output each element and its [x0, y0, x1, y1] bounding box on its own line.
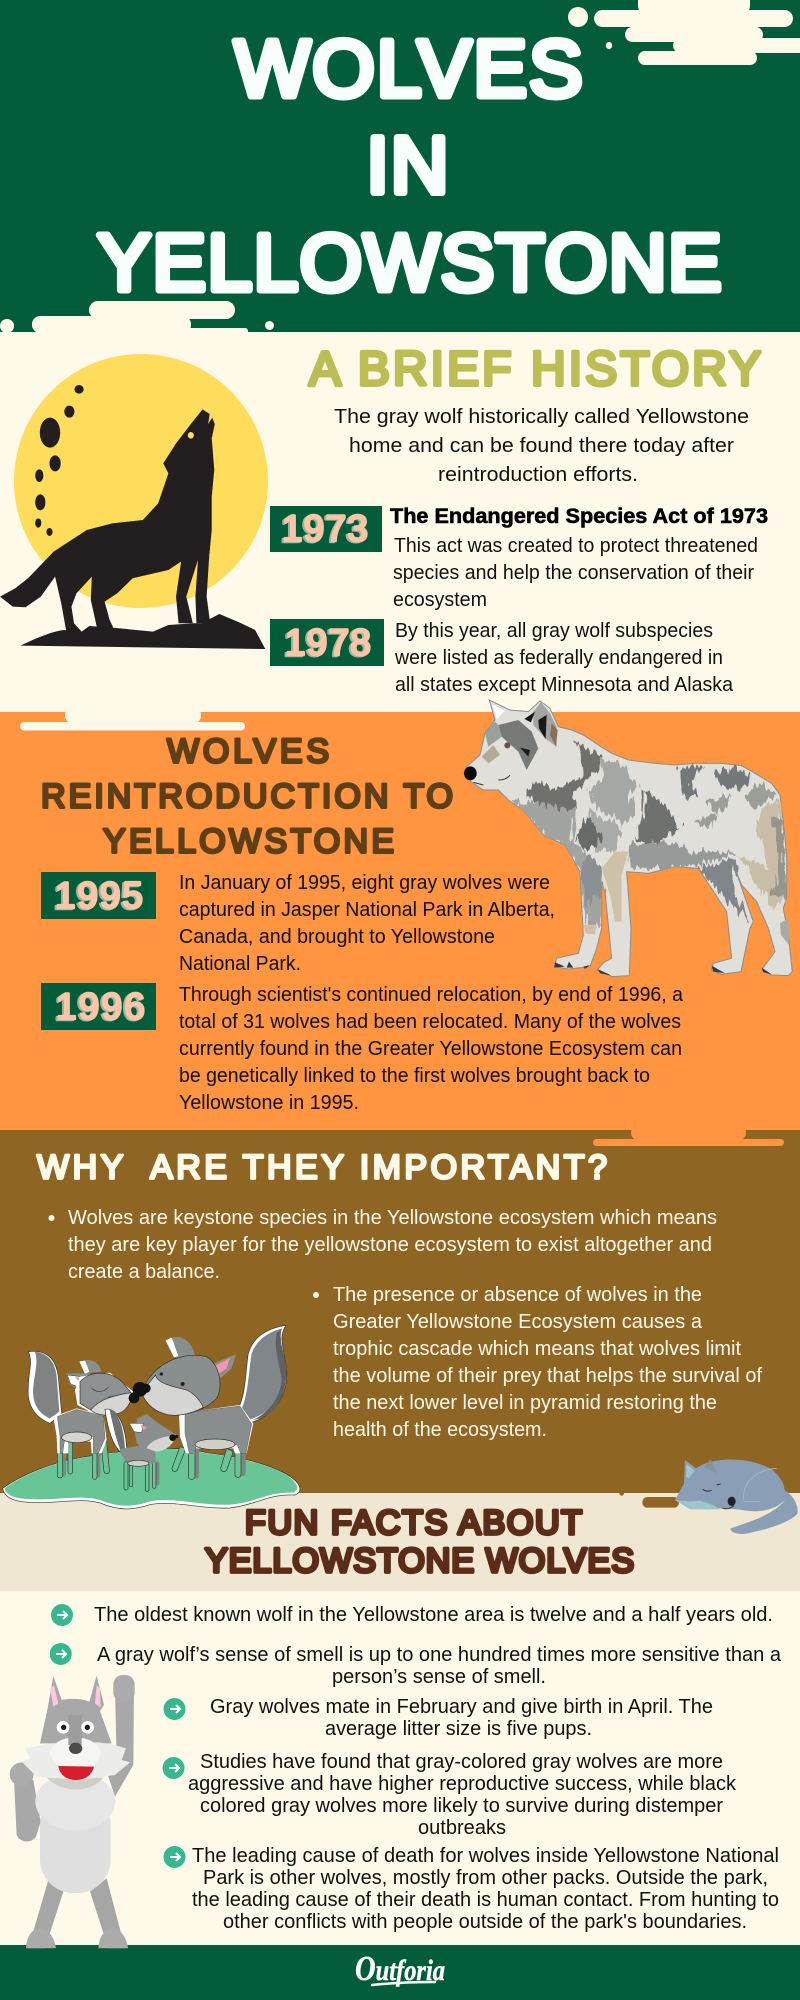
- panel: footer: [0, 1945, 800, 2000]
- cloud: bottom left: [0, 301, 274, 334]
- year badge: 1995: [41, 872, 156, 919]
- text: 1978 description: [394, 619, 734, 696]
- pup wolf: [105, 1409, 178, 1491]
- text: fact 5: the leading cause of their death is human contact. From hunting to: [192, 1888, 779, 1911]
- text: fact 4: aggressive and have higher reproductive success, while black: [188, 1772, 737, 1795]
- text: history intro: [334, 405, 749, 486]
- heading: fun facts about yellowstone wolves: [205, 1504, 634, 1580]
- panel: title header: [0, 0, 800, 334]
- subheading: endangered species act: The Endangered Species Act of 1973: [390, 505, 768, 528]
- bullet: trophic cascade: trophic cascade which means that wolves limit: [333, 1337, 741, 1360]
- icon: moon: [14, 354, 268, 608]
- bullet: keystone species: Wolves are keystone species in the Yellowstone ecosystem which means: [68, 1206, 717, 1229]
- big wolf: [142, 1325, 287, 1479]
- bullet: keystone species: create a balance.: [68, 1260, 220, 1283]
- text: fact 2: person’s sense of smell.: [332, 1665, 546, 1688]
- mother wolf: [28, 1351, 151, 1479]
- bullet: keystone species: they are key player for the yellowstone ecosystem to exist altogether and: [68, 1233, 712, 1256]
- illustration: standing gray wolf: [464, 700, 792, 977]
- panel: a brief history: [0, 332, 800, 712]
- bullet: trophic cascade: the volume of their prey that helps the survival of: [333, 1364, 762, 1387]
- heading: wolves reintroduction to yellowstone: REINTRODUCTION TO: [41, 778, 453, 816]
- text: 1978 description: By this year, all gray wolf subspecies: [395, 619, 713, 642]
- text: history intro: reintroduction efforts.: [438, 463, 638, 486]
- text: fact 4: colored gray wolves more likely to survive during distemper: [200, 1794, 723, 1817]
- text: 1996 description: Through scientist's continued relocation, by end of 1996, a: [179, 983, 684, 1006]
- text: 1978 description: were listed as federally endangered in: [394, 646, 723, 669]
- year badge: 1973: 1973: [282, 508, 368, 549]
- text: 1996 description: be genetically linked to the first wolves brought back to: [179, 1064, 650, 1087]
- illustration: sleeping blue wolf: [619, 1459, 798, 1534]
- text: 1996 description: total of 31 wolves had been relocated. Many of the wolves: [179, 1010, 681, 1033]
- year badge: 1996: [41, 983, 156, 1030]
- text: fact 5: [192, 1844, 779, 1933]
- icon: arrow bullet 3: [164, 1698, 186, 1720]
- title: YELLOWSTONE: [98, 218, 722, 307]
- heading: wolves reintroduction to yellowstone: YELLOWSTONE: [103, 822, 394, 860]
- heading: a brief history: A BRIEF HISTORY: [309, 343, 761, 396]
- text: fact 1: The oldest known wolf in the Yellowstone area is twelve and a half years old.: [94, 1603, 773, 1626]
- icon: arrow bullet 2: [50, 1643, 72, 1665]
- text: fact 3: [210, 1695, 713, 1740]
- text: 1996 description: currently found in the Greater Yellowstone Ecosystem can: [179, 1037, 682, 1060]
- text: 1973 description: [393, 534, 758, 611]
- cloud: brown panel top: [593, 1126, 784, 1146]
- title: WOLVES: [234, 24, 582, 113]
- logo: outforia: Outforia: [355, 1949, 445, 1988]
- text: fact 5: The leading cause of death for wolves inside Yellowstone National: [192, 1844, 779, 1867]
- panel: wolves reintroduction: [0, 700, 800, 1130]
- wolf fur patches: [512, 740, 787, 925]
- icon: arrow bullet 1: [51, 1604, 73, 1626]
- text: fact 3: Gray wolves mate in February and give birth in April. The: [210, 1695, 713, 1718]
- bullet: trophic cascade: Greater Yellowstone Ecosystem causes a: [333, 1310, 703, 1333]
- text: 1995 description: Canada, and brought to Yellowstone: [179, 925, 495, 948]
- icon: howling wolf silhouette: [0, 385, 265, 649]
- text: 1996 description: [179, 983, 684, 1114]
- text: fact 2: [97, 1643, 782, 1688]
- text: fact 5: other conflicts with people outside of the park's boundaries.: [223, 1910, 747, 1933]
- wolf head and leg details: [464, 702, 789, 976]
- text: 1995 description: In January of 1995, eight gray wolves were: [179, 871, 550, 894]
- bullet: trophic cascade: the next lower level in pyramid restoring the: [333, 1391, 717, 1414]
- year badge: 1978: 1978: [285, 622, 371, 663]
- icon: arrow bullet 4: [162, 1757, 184, 1779]
- icon: arrow bullet 5: [164, 1846, 186, 1868]
- text: 1995 description: National Park.: [179, 952, 301, 975]
- cloud: top right: [568, 0, 800, 65]
- illustration: wolf family on grass: [3, 1325, 300, 1509]
- text: 1996 description: Yellowstone in 1995.: [179, 1091, 359, 1114]
- title: [98, 24, 722, 307]
- illustration: cartoon wolf waving: [10, 1675, 135, 1948]
- text: 1973 description: This act was created to protect threatened: [394, 534, 758, 557]
- bullet: trophic cascade: health of the ecosystem.: [333, 1418, 547, 1441]
- heading: fun facts about yellowstone wolves: FUN FACTS ABOUT: [245, 1504, 582, 1542]
- bullet: trophic cascade: [313, 1283, 762, 1441]
- heading: wolves reintroduction to yellowstone: [41, 732, 453, 860]
- panel: fun facts header: [0, 1493, 800, 1591]
- text: fact 3: average litter size is five pups.: [325, 1717, 592, 1740]
- year badge: 1996: 1996: [56, 986, 145, 1027]
- bullet: keystone species: [48, 1206, 717, 1283]
- text: 1973 description: species and help the conservation of their: [393, 561, 754, 584]
- year badge: 1973: [270, 506, 382, 552]
- panel: why are they important: [0, 1126, 800, 1493]
- text: fact 4: outbreaks: [418, 1816, 506, 1839]
- heading: fun facts about yellowstone wolves: YELLOWSTONE WOLVES: [205, 1542, 634, 1580]
- cloud: orange panel top: [20, 708, 245, 730]
- heading: why are they important: WHY ARE THEY IMPORTANT?: [37, 1148, 607, 1186]
- text: fact 4: Studies have found that gray-colored gray wolves are more: [200, 1750, 723, 1773]
- text: history intro: The gray wolf historically called Yellowstone: [334, 405, 749, 428]
- text: fact 4: [188, 1750, 737, 1839]
- text: 1995 description: [179, 871, 555, 975]
- text: 1995 description: captured in Jasper National Park in Alberta,: [179, 898, 555, 921]
- title: IN: [366, 120, 448, 210]
- text: history intro: home and can be found there today after: [349, 434, 734, 457]
- text: fact 5: Park is other wolves, mostly from other packs. Outside the park,: [203, 1866, 768, 1889]
- bullet: trophic cascade: The presence or absence of wolves in the: [333, 1283, 702, 1306]
- year badge: 1995: 1995: [55, 875, 143, 916]
- panel: fun facts list: [0, 1591, 800, 1945]
- text: 1973 description: ecosystem: [393, 588, 487, 611]
- year badge: 1978: [270, 619, 384, 666]
- text: 1978 description: all states except Minnesota and Alaska: [395, 673, 734, 696]
- heading: wolves reintroduction to yellowstone: WOLVES: [167, 732, 329, 770]
- text: fact 2: A gray wolf’s sense of smell is up to one hundred times more sensitive than a: [97, 1643, 782, 1666]
